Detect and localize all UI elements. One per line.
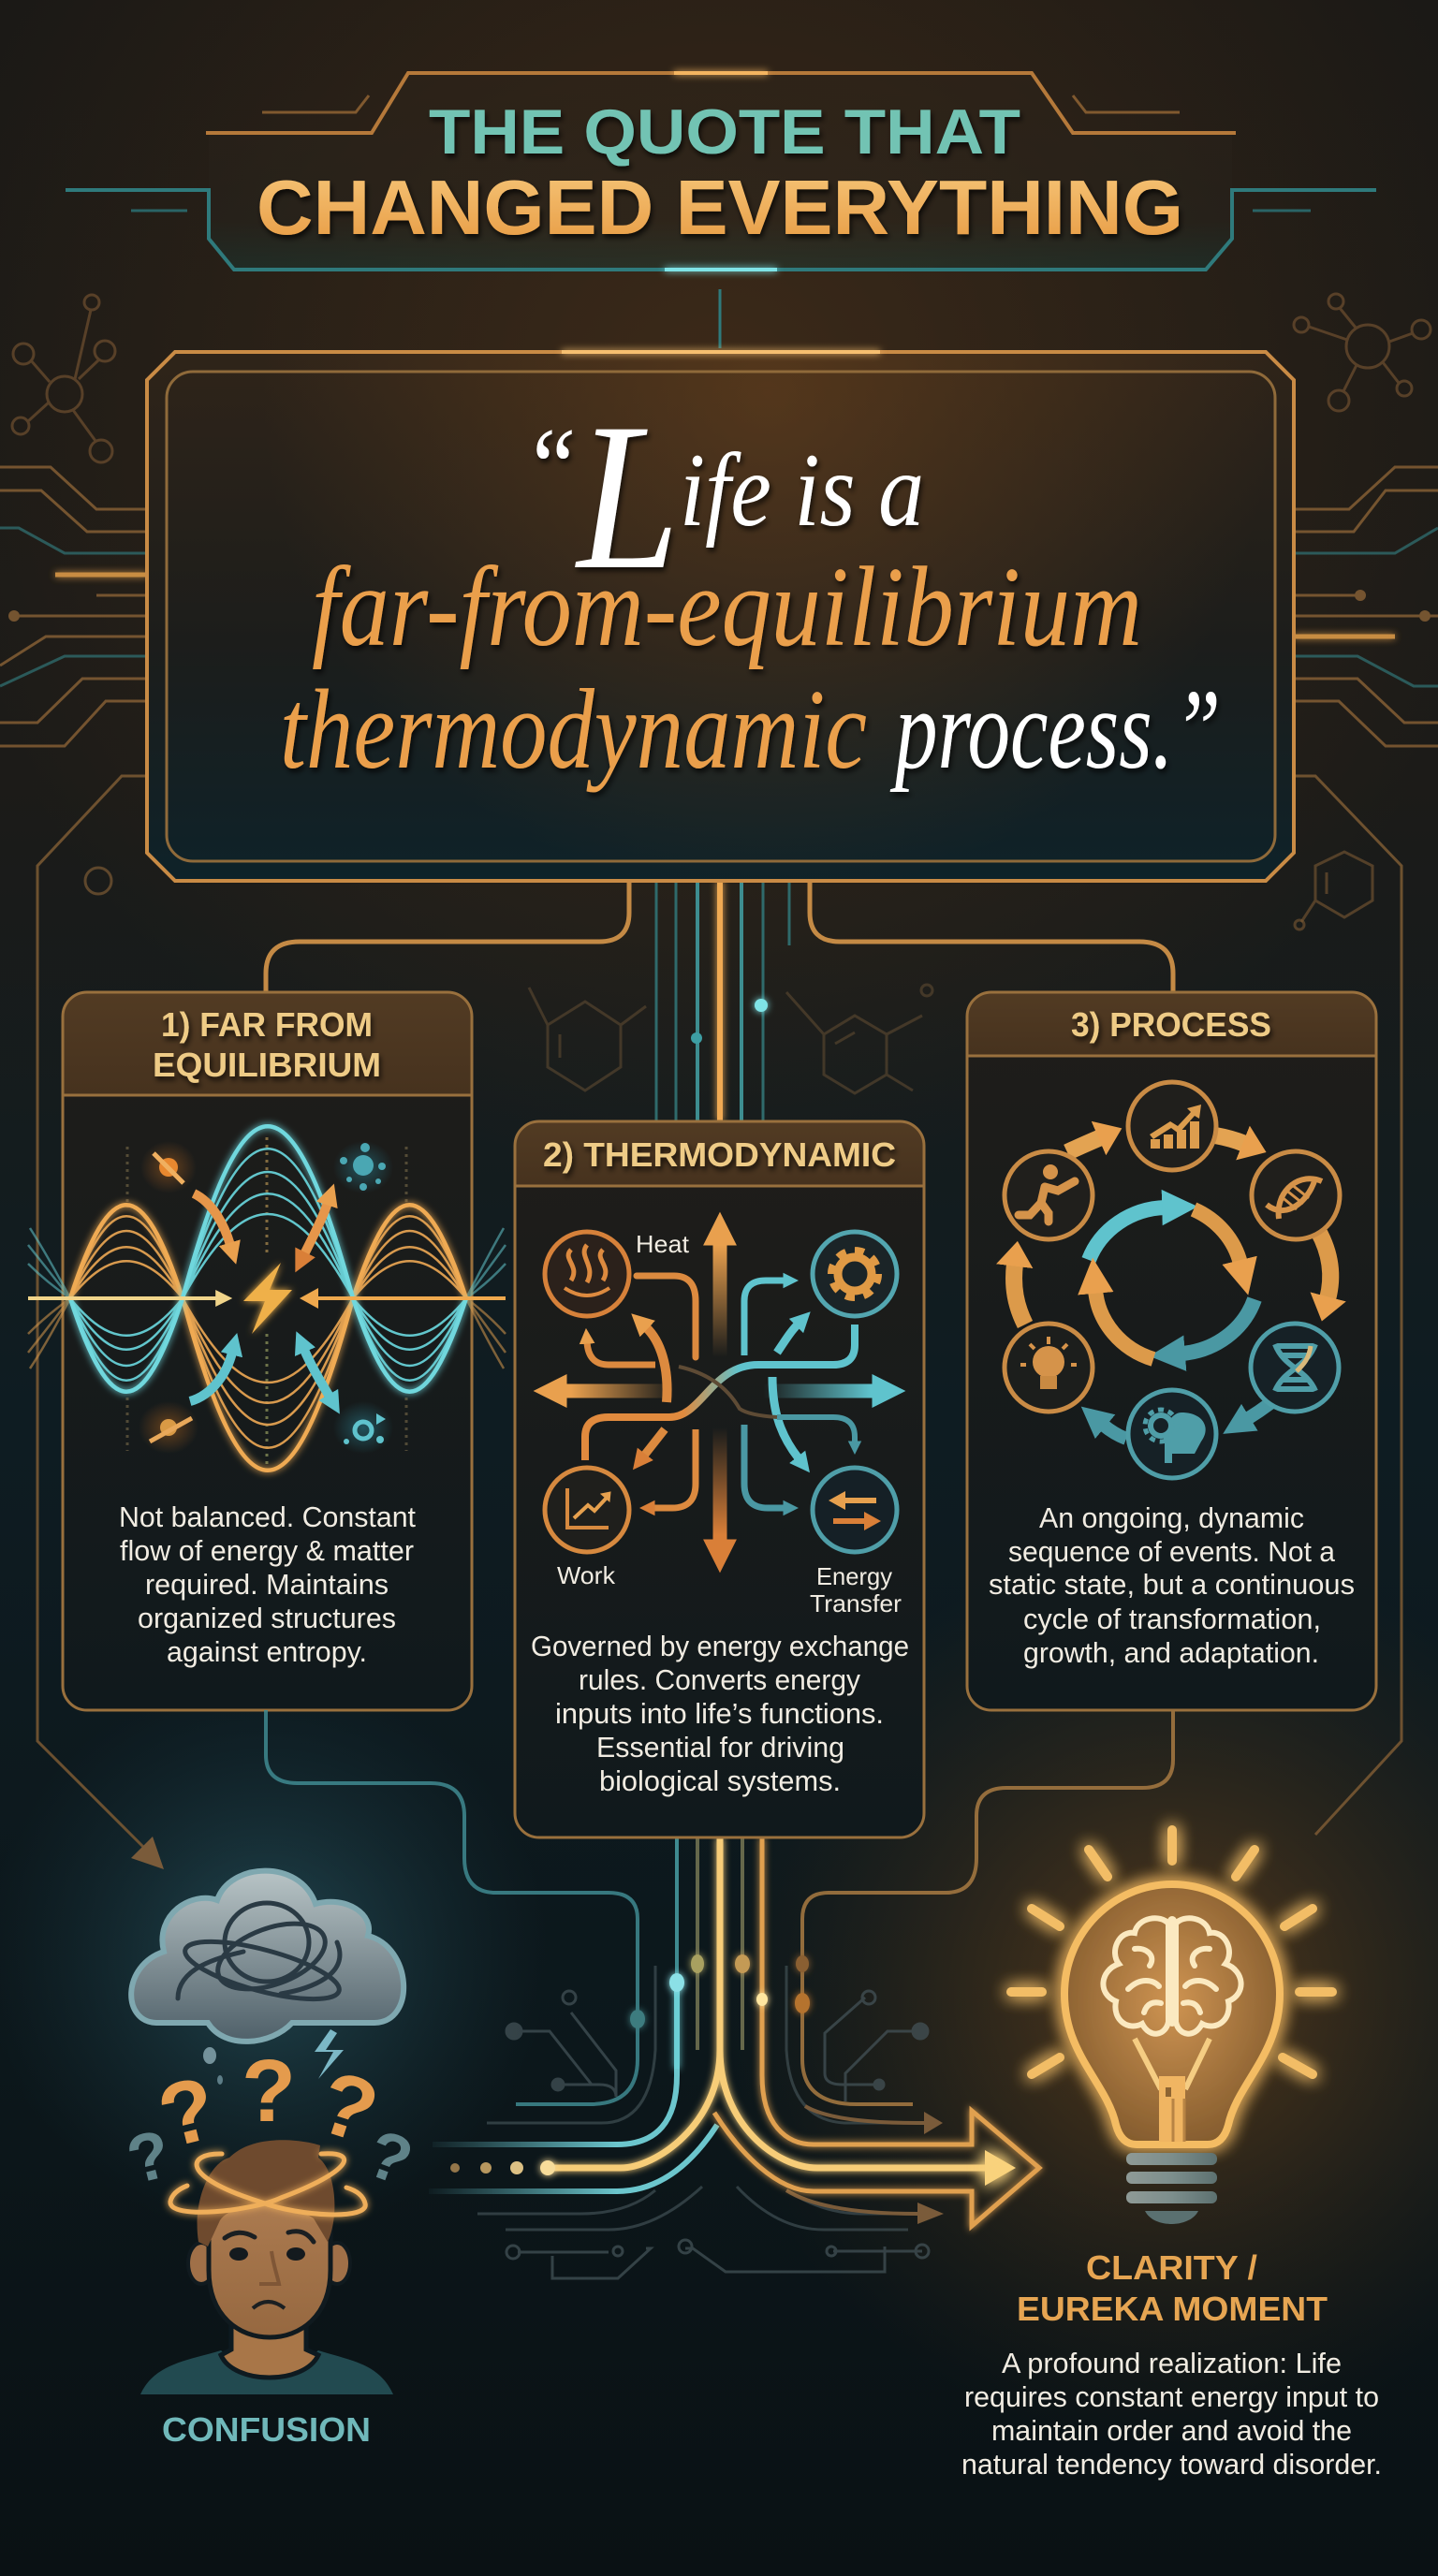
body text: cycle of transformation, xyxy=(1023,1603,1321,1635)
body text: Not balanced. Constant xyxy=(119,1500,416,1533)
wires below side cards xyxy=(266,1710,1173,2104)
quote line 1: L xyxy=(575,380,680,613)
molecule decoration right xyxy=(1294,294,1431,411)
faint circuits lower middle xyxy=(477,1966,936,2278)
icon: dna xyxy=(1267,1178,1322,1219)
icon: question marks xyxy=(120,2042,422,2201)
icon: bulb xyxy=(1020,1337,1077,1389)
quote box xyxy=(147,352,1294,881)
converging flow arrow xyxy=(429,1837,1039,2226)
icon: heat xyxy=(545,1232,629,1316)
clarity text: natural tendency toward disorder. xyxy=(961,2448,1382,2481)
flow arrows xyxy=(190,1193,330,1401)
central s curve xyxy=(585,1325,855,1460)
teal cycle arrows xyxy=(1103,1403,1270,1439)
panel: process xyxy=(967,992,1376,1710)
heading: 3) PROCESS xyxy=(1071,1005,1271,1044)
body text: flow of energy & matter xyxy=(120,1534,414,1567)
icon: head and gear xyxy=(1145,1410,1206,1463)
faint arrows near main arrow xyxy=(786,2106,944,2224)
circuit traces left of quote box xyxy=(0,467,147,746)
panel: far from equilibrium xyxy=(28,992,506,1710)
outer frame lines xyxy=(37,776,1401,1869)
heading xyxy=(153,1005,381,1084)
icon: small bolt and drops xyxy=(203,2029,344,2085)
dizzy rings xyxy=(170,2154,365,2215)
body text: An ongoing, dynamic xyxy=(1039,1501,1304,1534)
screw base xyxy=(1126,2153,1217,2224)
quote line 1: ife is a xyxy=(680,432,924,548)
title text line 1: THE QUOTE THAT xyxy=(429,96,1020,168)
diagram labels: Energy xyxy=(816,1562,892,1590)
brain xyxy=(1103,1918,1241,2034)
molecule decoration left xyxy=(12,295,115,462)
label: clarity xyxy=(1017,2248,1328,2328)
middle wires from quote to second card xyxy=(266,881,1173,1121)
quote line 2: far-from-equilibrium xyxy=(312,544,1142,670)
clarity text xyxy=(961,2347,1382,2481)
icon: work xyxy=(545,1468,629,1552)
icon: growth chart xyxy=(1150,1105,1201,1149)
icon: question marks: ? xyxy=(120,2116,178,2199)
icon: question marks: ? xyxy=(242,2042,296,2141)
body text xyxy=(989,1501,1355,1669)
body text: static state, but a continuous xyxy=(989,1568,1355,1601)
body text: required. Maintains xyxy=(145,1568,389,1601)
wave chart xyxy=(28,1126,506,1471)
body text: against entropy. xyxy=(167,1635,367,1668)
title text line 2: CHANGED EVERYTHING xyxy=(257,164,1183,251)
main axis arrows xyxy=(564,1242,875,1543)
heading: 2) THERMODYNAMIC xyxy=(543,1135,896,1174)
heading: 1) FAR FROM xyxy=(161,1005,373,1044)
body text xyxy=(531,1630,909,1797)
body text: Governed by energy exchange xyxy=(531,1630,909,1662)
filament xyxy=(1135,2039,1210,2142)
body text: rules. Converts energy xyxy=(579,1663,860,1696)
horizontal arrows xyxy=(28,1296,217,1300)
body text: inputs into life’s functions. xyxy=(555,1697,884,1730)
inner cycle arrows xyxy=(1089,1208,1255,1359)
outer cycle arrows xyxy=(1014,1135,1330,1325)
body text: Essential for driving xyxy=(596,1731,844,1764)
icon: question marks: ? xyxy=(307,2052,389,2163)
icon: energy transfer xyxy=(813,1468,897,1552)
quote line 1 xyxy=(522,380,924,613)
icon: question marks: ? xyxy=(358,2115,422,2201)
diagram labels: Work xyxy=(557,1561,616,1589)
title plaque xyxy=(66,73,1376,270)
circuit traces right of quote box xyxy=(1294,467,1438,746)
rays xyxy=(1011,1830,1332,2074)
body text xyxy=(119,1500,416,1668)
clarity text: requires constant energy input to xyxy=(964,2380,1379,2413)
junction dots xyxy=(630,1954,810,2028)
orange flow arrows xyxy=(587,1276,696,1508)
panel: thermodynamic xyxy=(515,1121,924,1837)
icon: dna hourglass xyxy=(1275,1344,1315,1391)
body text: biological systems. xyxy=(599,1764,841,1797)
label: clarity: CLARITY / xyxy=(1086,2248,1257,2287)
icon circles xyxy=(1005,1082,1340,1478)
figure: confused person xyxy=(140,2140,393,2394)
icon: runner xyxy=(1019,1165,1075,1222)
icon: light bulb with brain xyxy=(1011,1830,1332,2224)
quote line 1: “ xyxy=(522,406,577,530)
label: clarity: EUREKA MOMENT xyxy=(1017,2290,1328,2328)
heading: EQUILIBRIUM xyxy=(153,1046,381,1084)
clarity text: maintain order and avoid the xyxy=(991,2414,1352,2447)
icon: confusion cloud xyxy=(131,1871,404,2042)
quote line 3 amber: thermodynamic xyxy=(280,666,867,793)
particle icons xyxy=(139,1141,393,1454)
body text: sequence of events. Not a xyxy=(1008,1535,1336,1568)
diagram labels: Heat xyxy=(636,1230,690,1258)
body text: organized structures xyxy=(138,1602,396,1634)
teal flow arrows xyxy=(679,1281,855,1508)
diagram labels xyxy=(557,1230,902,1617)
label: confusion: CONFUSION xyxy=(162,2410,371,2449)
icon: question marks: ? xyxy=(149,2058,226,2167)
body text: growth, and adaptation. xyxy=(1023,1636,1319,1669)
diagram labels: Transfer xyxy=(810,1589,902,1617)
clarity text: A profound realization: Life xyxy=(1002,2347,1342,2379)
icon: gear xyxy=(813,1232,897,1316)
lightning bolt xyxy=(243,1263,292,1334)
faint hex molecules behind cards xyxy=(529,985,932,1093)
quote line 3 white: process.” xyxy=(889,666,1221,793)
connector from title to quote xyxy=(719,289,721,348)
